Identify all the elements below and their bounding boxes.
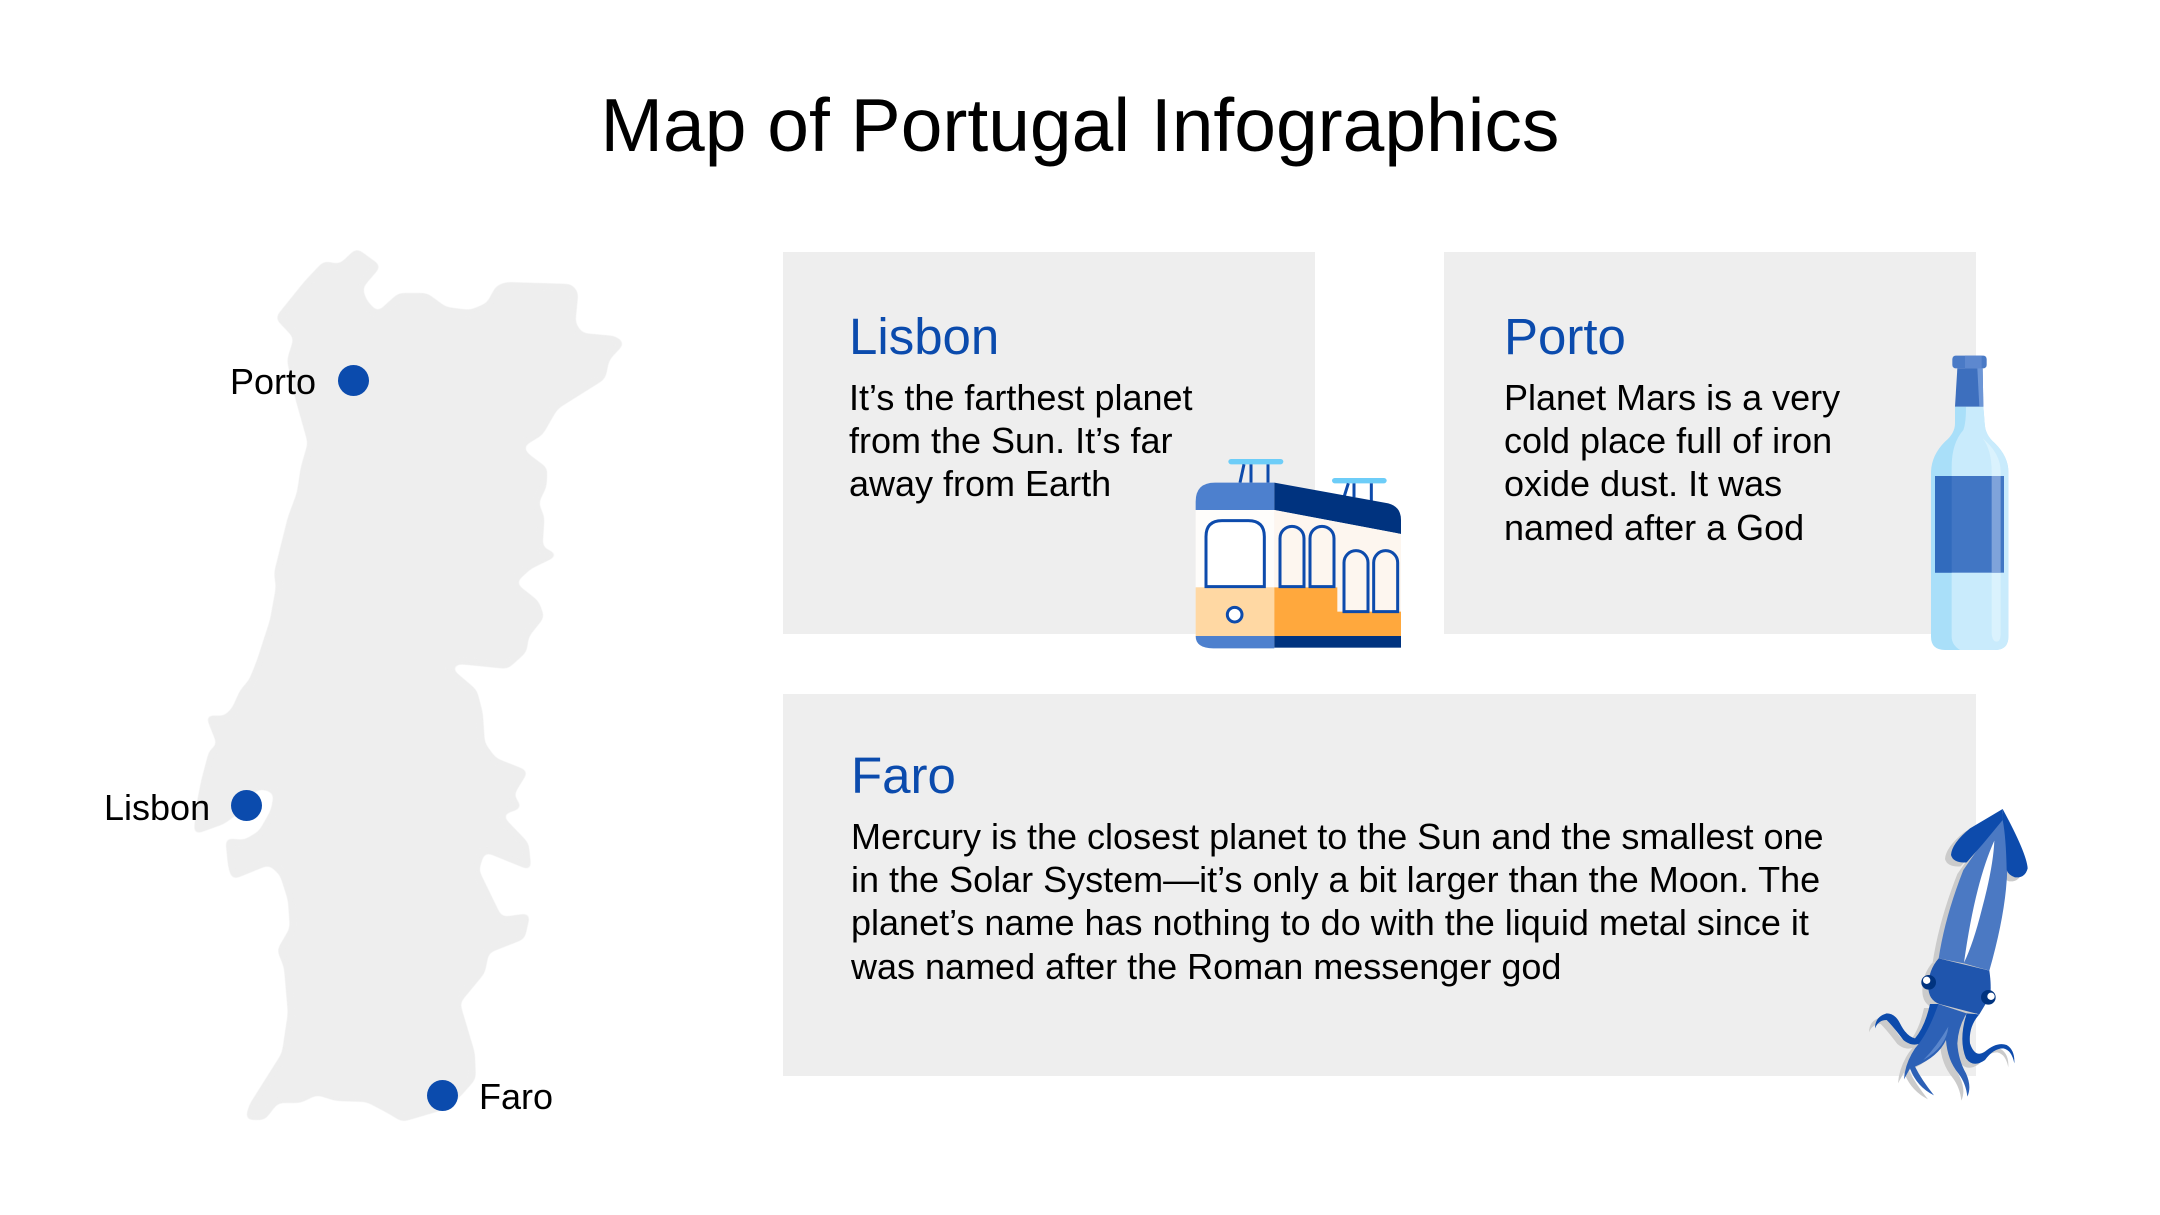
map marker: Porto [338, 365, 369, 396]
text: Porto [1504, 377, 1840, 548]
map label: Faro: Faro [479, 1076, 553, 1117]
text: Faro: Mercury is the closest planet to the Sun and the smallest one [851, 816, 1824, 857]
icon: wine bottle [1931, 356, 2008, 650]
text: Faro: planet’s name has nothing to do with the liquid metal since it [851, 902, 1809, 943]
map label: Lisbon: Lisbon [104, 787, 210, 828]
panel: Lisbon [783, 252, 1315, 634]
map marker: Faro [427, 1080, 458, 1111]
icon: tram [1196, 459, 1401, 648]
panel: Porto [1444, 252, 1976, 634]
icon: squid [1869, 809, 2028, 1100]
title: Map of Portugal Infographics [601, 83, 1559, 167]
heading: Porto: Porto [1504, 308, 1626, 365]
heading: Lisbon: Lisbon [849, 308, 999, 365]
map marker: Lisbon [231, 790, 262, 821]
text: Faro: in the Solar System—it’s only a bit larger than the Moon. The [851, 859, 1820, 900]
text: Porto: Planet Mars is a very [1504, 377, 1840, 418]
text: Lisbon: It’s the farthest planet [849, 377, 1193, 418]
heading: Faro: Faro [851, 747, 956, 804]
text: Porto: cold place full of iron [1504, 420, 1832, 461]
text: Lisbon: away from Earth [849, 463, 1111, 504]
panel: Faro [783, 694, 1976, 1076]
text: Faro: was named after the Roman messenger god [851, 946, 1561, 987]
text: Lisbon: from the Sun. It’s far [849, 420, 1172, 461]
text: Faro [851, 816, 1824, 987]
text: Porto: oxide dust. It was [1504, 463, 1782, 504]
text: Porto: named after a God [1504, 507, 1804, 548]
map label: Porto: Porto [230, 361, 316, 402]
text: Lisbon [849, 377, 1193, 504]
